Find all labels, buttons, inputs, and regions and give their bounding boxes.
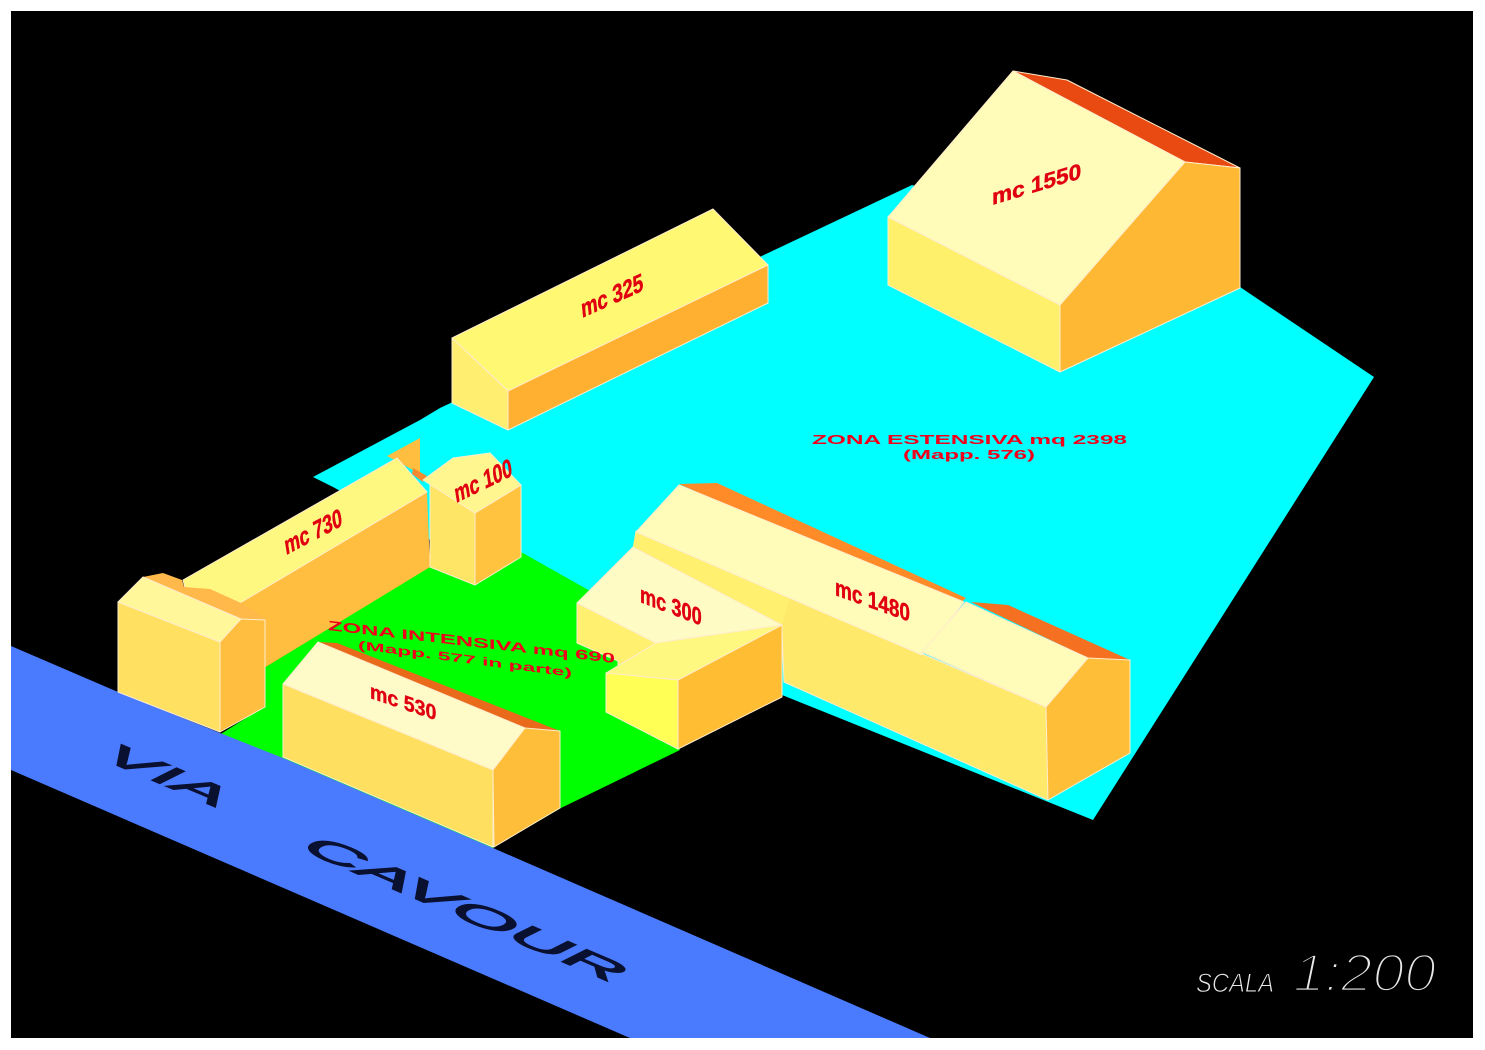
- road label: VIA CAVOUR: CAVOUR: [289, 832, 643, 986]
- scale label: SCALA: [1196, 968, 1274, 998]
- zone label: ZONA INTENSIVA: (Mapp. 577 in parte): [358, 638, 572, 680]
- mc 1550 rear roof slope: [1013, 71, 1240, 168]
- mc 100 front wall: [430, 483, 475, 585]
- zone label: ZONA ESTENSIVA: (Mapp. 576): [903, 447, 1035, 462]
- mc 1480 strip under eave: [633, 531, 790, 625]
- mc 300 low front wall: [606, 673, 678, 749]
- mc 1550 side wall: [1060, 162, 1240, 372]
- mc 730 ridge piece: [412, 468, 427, 482]
- scale label: [1196, 944, 1437, 1003]
- mc 1480 rear roof slope: [679, 483, 966, 607]
- mc 300 front wall: [577, 603, 656, 666]
- mc 530 front wall: [283, 684, 493, 847]
- mc 100 side wall: [475, 485, 521, 585]
- corner block front wall: [118, 602, 220, 732]
- zone label: ZONA INTENSIVA: ZONA INTENSIVA mq 690: [328, 619, 615, 667]
- label mc 530: mc 530: [370, 680, 436, 725]
- mc 730 rear gable: [387, 438, 420, 472]
- mc 1480 front wall: [633, 531, 1048, 800]
- zone label: ZONA INTENSIVA: [328, 619, 615, 680]
- mc 300 low roof: [606, 625, 782, 680]
- building: mc 100: [423, 453, 521, 585]
- mc 530 roof: [283, 642, 525, 770]
- label mc 100: mc 100: [452, 453, 514, 509]
- building: mc 530: [283, 642, 560, 847]
- mc 100 roof: [423, 453, 521, 513]
- building: mc 325: [452, 209, 768, 430]
- panel: zona intensiva green lot: [216, 552, 680, 853]
- corner block roof: [118, 577, 241, 642]
- corner block rear roof slope: [143, 573, 267, 622]
- building: mc 1480: [633, 483, 1130, 800]
- label mc 300: mc 300: [640, 580, 702, 631]
- label mc 1480: mc 1480: [835, 573, 910, 627]
- mc 325 end wall: [452, 338, 508, 430]
- building: mc 300: [577, 547, 782, 749]
- mc 1480 side wall: [1046, 658, 1130, 800]
- mc 730 long wall: [240, 492, 430, 668]
- corner block side wall: [220, 619, 265, 732]
- building: mc 1550: [888, 71, 1240, 372]
- mc 300 roof: [577, 547, 782, 643]
- zone label: ZONA ESTENSIVA: ZONA ESTENSIVA mq 2398: [812, 432, 1127, 447]
- label mc 1550: mc 1550: [992, 158, 1081, 210]
- mc 530 side wall: [493, 728, 560, 847]
- building: mc 730: [183, 438, 430, 668]
- road label: VIA CAVOUR: VIA: [89, 741, 247, 811]
- mc 1480 second rear roof slope: [971, 602, 1130, 660]
- scale label: 1:200: [1293, 944, 1437, 1003]
- road label: VIA CAVOUR: [89, 741, 643, 986]
- mc 1480 second roof: [922, 602, 1088, 707]
- panel: zona estensiva cyan lot: [313, 185, 1374, 820]
- label mc 730: mc 730: [282, 503, 344, 561]
- mc 300 low side wall: [678, 625, 782, 749]
- road: Via Cavour: [11, 646, 930, 1038]
- zone label: ZONA ESTENSIVA: [812, 432, 1127, 462]
- mc 1550 roof: [888, 71, 1185, 305]
- mc 730 roof: [183, 458, 427, 603]
- mc 325 roof: [452, 209, 768, 391]
- building: left corner block: [118, 573, 267, 732]
- mc 1550 front wall: [888, 217, 1060, 372]
- mc 530 rear roof slope: [318, 642, 560, 731]
- mc 1480 roof: [636, 485, 964, 655]
- mc 325 long wall: [508, 265, 768, 430]
- label mc 325: mc 325: [580, 267, 644, 324]
